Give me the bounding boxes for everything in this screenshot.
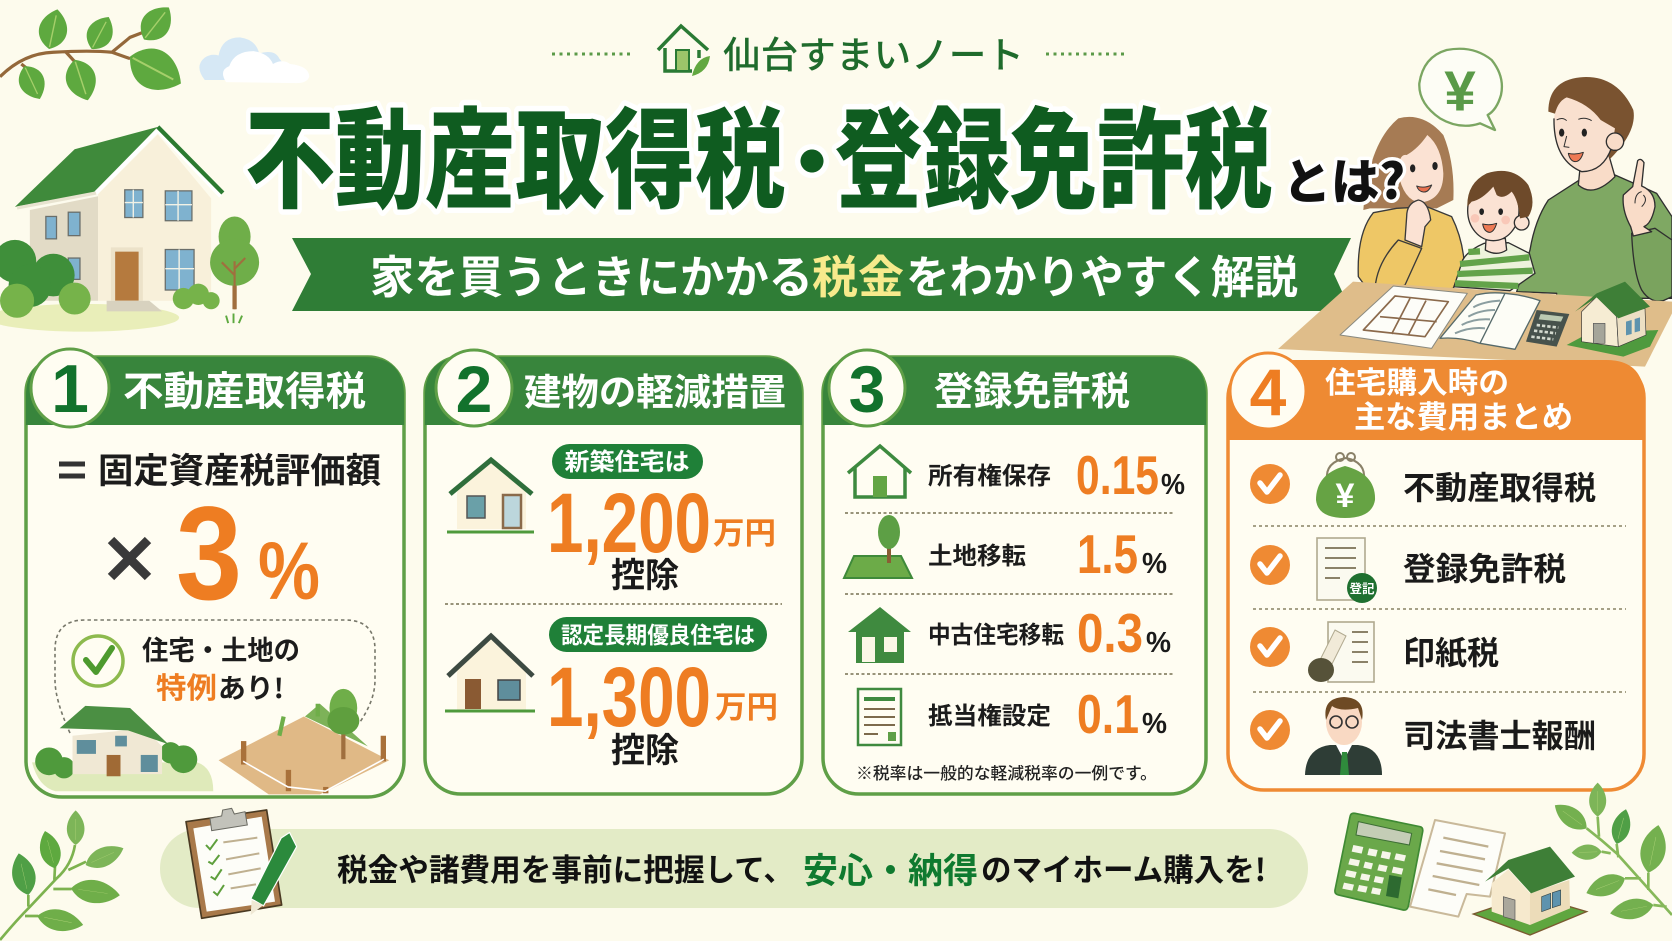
calculator on table bbox=[1526, 310, 1569, 347]
item: acquisition tax: 不動産取得税 bbox=[1403, 463, 1596, 509]
icon: coin purse: ¥ bbox=[1336, 477, 1355, 515]
footnote: ※税率は一般的な軽減税率の一例です。 bbox=[856, 760, 1157, 784]
panel 1 body bbox=[26, 357, 404, 797]
rate 0.15: 0.15 bbox=[1076, 444, 1159, 506]
speech bubble yen bbox=[1419, 49, 1502, 130]
deduction label 2: 控除 bbox=[611, 723, 679, 772]
label: land transfer: 土地移転 bbox=[928, 536, 1026, 571]
icon: judicial scrivener bbox=[1305, 697, 1382, 775]
illustration: large house bbox=[0, 127, 259, 332]
multiply sign bbox=[111, 540, 148, 577]
equals sign bbox=[59, 464, 85, 476]
title dot: ・ bbox=[767, 91, 857, 221]
bottom message banner bbox=[160, 829, 1308, 908]
amount 1,200: 1,200 bbox=[547, 476, 711, 570]
number badge 3 bbox=[829, 350, 905, 426]
panel 2 heading: 建物の軽減措置 bbox=[524, 362, 786, 416]
icon: filled house bbox=[848, 607, 911, 663]
rate 3: 3 bbox=[176, 480, 242, 628]
panel 1 heading: 不動産取得税 bbox=[123, 359, 366, 417]
panel 2: building reduction bbox=[425, 350, 802, 794]
message highlight: 安心・納得 bbox=[803, 843, 978, 894]
panel 4 heading line 2: 主な費用まとめ bbox=[1354, 392, 1573, 437]
icon: logo house bbox=[658, 26, 708, 71]
number badge 1 bbox=[31, 349, 109, 427]
rate 1.5: 1.5 bbox=[1077, 523, 1138, 585]
icon: coin purse bbox=[1316, 453, 1375, 518]
pill: new housing: 新築住宅は bbox=[564, 442, 690, 477]
icon: house 2 bbox=[445, 636, 535, 711]
panel 2 header bbox=[425, 357, 802, 425]
panel 1: real estate acquisition tax bbox=[26, 349, 404, 797]
panel 4: main costs summary bbox=[1228, 353, 1644, 790]
logo dots left bbox=[552, 52, 634, 56]
title part 1: 不動産取得税 bbox=[245, 74, 785, 231]
panel 4 heading line 1: 住宅購入時の bbox=[1325, 358, 1509, 402]
child bbox=[1454, 171, 1535, 291]
bottom right house bbox=[1473, 847, 1587, 935]
panel 2 body bbox=[425, 357, 802, 794]
message start: 税金や諸費用を事前に把握して、 bbox=[337, 845, 794, 890]
banner text: 家を買うときにかかる bbox=[370, 241, 813, 306]
label: mortgage: 抵当権設定 bbox=[928, 696, 1051, 731]
callout text 1: 住宅・土地の bbox=[142, 629, 300, 668]
illustration: bottom left leaves bbox=[0, 810, 127, 940]
number badge 2: 2 bbox=[456, 352, 492, 426]
pill: long-life housing: 認定長期優良住宅は bbox=[561, 616, 755, 650]
subtitle banner bbox=[292, 238, 1351, 311]
illustration: calculator, paper, house bbox=[1335, 813, 1587, 935]
panel 3: registration license tax bbox=[823, 350, 1206, 794]
panel 3 heading: 登録免許税 bbox=[934, 361, 1130, 417]
icon: outline house bbox=[848, 446, 911, 497]
dashed callout bbox=[55, 620, 375, 733]
banner pill bbox=[160, 829, 1308, 908]
open book bbox=[1440, 293, 1540, 349]
banner ribbon bbox=[292, 238, 1351, 311]
item: scrivener fee: 司法書士報酬 bbox=[1403, 711, 1596, 757]
number badge 1: 1 bbox=[51, 351, 89, 427]
number badge 4 bbox=[1230, 353, 1306, 429]
percent 0.3: % bbox=[1146, 627, 1171, 659]
floor plan bbox=[1340, 286, 1467, 348]
rate 0.1: 0.1 bbox=[1077, 683, 1139, 745]
panel 1 header bbox=[26, 357, 404, 425]
number badge 4: 4 bbox=[1250, 355, 1287, 429]
illustration: top left branch bbox=[0, 0, 190, 105]
panel 4 header bbox=[1228, 360, 1644, 440]
man bbox=[1517, 77, 1672, 301]
illustration: house and land bbox=[32, 689, 389, 794]
label: ownership: 所有権保存 bbox=[928, 456, 1051, 491]
unit man-en: 万円 bbox=[713, 508, 776, 553]
item: registration tax: 登録免許税 bbox=[1403, 544, 1566, 590]
woman bbox=[1358, 117, 1464, 302]
title suffix: とは? bbox=[1283, 143, 1405, 214]
formula text: 固定資産税評価額 bbox=[98, 443, 381, 494]
logo text: 仙台すまいノート bbox=[723, 25, 1024, 79]
panel 3 body bbox=[823, 357, 1206, 794]
banner highlight: 税金 bbox=[812, 241, 904, 306]
percent sign: % bbox=[258, 526, 320, 617]
illustration: family at table bbox=[1278, 49, 1672, 367]
check row 4 bbox=[1250, 710, 1290, 750]
icon: house 1 bbox=[447, 459, 534, 532]
icon: land with tree bbox=[844, 515, 912, 578]
check row 1 bbox=[1250, 464, 1290, 504]
item: stamp tax: 印紙税 bbox=[1403, 628, 1499, 674]
icon: stamp and document bbox=[1308, 622, 1374, 682]
panel 4 body bbox=[1228, 362, 1644, 790]
wooden table bbox=[1278, 282, 1672, 367]
bottom right paper bbox=[1410, 820, 1505, 917]
callout text 2: あり! bbox=[218, 667, 284, 706]
panel 3 header bbox=[823, 357, 1206, 425]
label: used home transfer: 中古住宅移転 bbox=[928, 615, 1064, 650]
amount 1,300: 1,300 bbox=[547, 650, 711, 744]
illustration: clipboard and pen bbox=[186, 808, 296, 918]
number badge 2 bbox=[436, 350, 512, 426]
percent 0.1: % bbox=[1142, 708, 1167, 740]
logo bbox=[552, 25, 1128, 79]
icon: registration doc: 登記 bbox=[1349, 578, 1375, 597]
check icon bbox=[73, 636, 123, 686]
illustration: bottom right leaves bbox=[1549, 783, 1672, 923]
check row 3 bbox=[1250, 627, 1290, 667]
message end: のマイホーム購入を! bbox=[981, 845, 1266, 890]
logo dots right bbox=[1046, 52, 1128, 56]
check row 2 bbox=[1250, 545, 1290, 585]
banner text end: をわかりやすく解説 bbox=[906, 241, 1298, 306]
unit man-en 2: 万円 bbox=[715, 682, 778, 727]
callout highlight: 特例 bbox=[156, 665, 217, 707]
title part 2: 登録免許税 bbox=[835, 74, 1272, 231]
number badge 3: 3 bbox=[849, 352, 885, 426]
speech bubble yen: ¥ bbox=[1444, 61, 1476, 124]
icon: document bbox=[858, 689, 901, 745]
illustration: cloud bbox=[199, 37, 309, 83]
icon: registration doc bbox=[1317, 538, 1377, 603]
deduction label: 控除 bbox=[611, 548, 679, 597]
bottom right calculator bbox=[1335, 813, 1423, 910]
logo leaf bbox=[692, 56, 710, 76]
percent 0.15: % bbox=[1161, 469, 1185, 501]
percent 1.5: % bbox=[1142, 548, 1167, 580]
rate 0.3: 0.3 bbox=[1077, 602, 1143, 664]
small model house bbox=[1567, 282, 1658, 357]
title bbox=[245, 74, 1272, 231]
